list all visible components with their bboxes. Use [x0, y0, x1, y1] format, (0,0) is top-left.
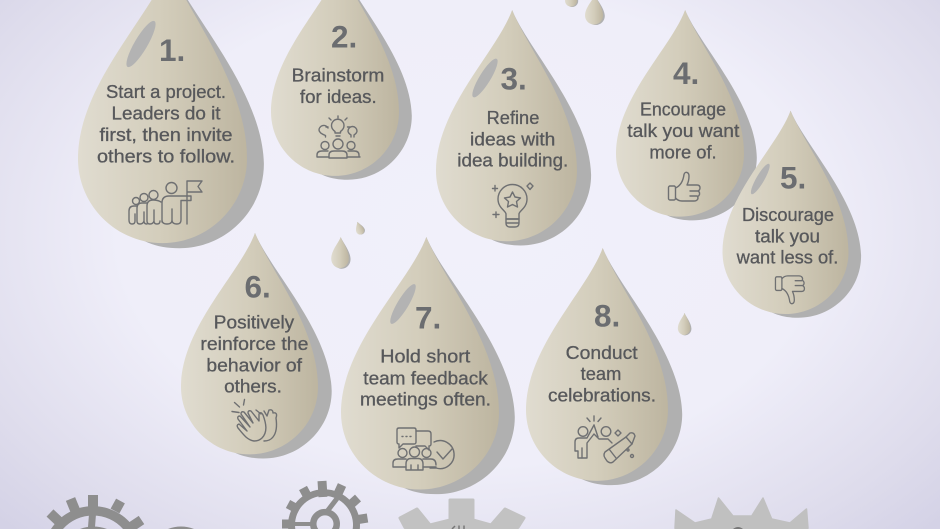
step text: Hold short [380, 347, 470, 367]
step text: Conduct [566, 343, 638, 363]
drop shape [181, 233, 332, 458]
icon: team brainstorming with light bulbs [317, 116, 360, 158]
gear 3 [400, 500, 524, 529]
number: 7. [415, 299, 441, 335]
drop 6 [181, 233, 332, 458]
icon: thumbs up [668, 172, 700, 201]
number: 5. [780, 159, 806, 195]
drop 7 [341, 237, 515, 494]
gear 1 [50, 495, 194, 529]
icon: leader with flag and followers [129, 181, 202, 224]
step text: behavior of [206, 356, 303, 376]
drop shape [526, 248, 682, 485]
step text: meetings often. [360, 390, 491, 410]
gear 4 [675, 498, 808, 529]
step text: want less of. [736, 247, 838, 267]
step text [360, 347, 491, 410]
step text: ideas with [470, 129, 555, 149]
step text: first, then invite [100, 125, 232, 145]
icon: thumbs down [775, 276, 804, 304]
icon: team meeting with speech bubbles and clock [393, 428, 454, 470]
step text: team feedback [363, 368, 489, 388]
highlight [469, 56, 501, 100]
highlight [748, 162, 773, 196]
icon: light bulb with star [492, 183, 533, 227]
step text: Positively [214, 312, 294, 332]
step text: Leaders do it [112, 104, 220, 124]
small drop: top left [565, 0, 578, 7]
step text: Brainstorm [292, 66, 384, 86]
icon: clapping hands [232, 400, 277, 441]
number: 3. [500, 60, 527, 96]
step text [548, 343, 656, 406]
step text [736, 205, 838, 267]
drop shape [616, 10, 757, 220]
number: 8. [594, 298, 620, 334]
highlight [386, 281, 420, 327]
drop shape [271, 0, 412, 180]
step text: talk you [755, 226, 820, 246]
small drop: top right [585, 0, 605, 25]
step text: for ideas. [300, 87, 377, 107]
step text [292, 66, 384, 107]
highlight [122, 18, 160, 70]
drop 8 [526, 248, 682, 485]
number: 4. [673, 55, 699, 91]
drop shape [341, 237, 515, 494]
step text: more of. [649, 142, 717, 162]
step text: reinforce the [200, 334, 308, 354]
number: 2. [331, 19, 357, 55]
step text: Encourage [640, 100, 726, 120]
small drop: centre [331, 237, 351, 269]
small drop: right [678, 313, 691, 335]
step text [200, 312, 308, 397]
step text: Refine [487, 108, 539, 128]
number: 6. [244, 268, 271, 304]
drop shape [436, 10, 591, 245]
step text: talk you want [627, 121, 739, 141]
drop 4 [616, 10, 757, 220]
step text [627, 100, 739, 162]
drop shape [722, 111, 861, 318]
step text [97, 82, 235, 167]
small drop: tilted [353, 220, 366, 236]
step text: Start a project. [106, 82, 226, 102]
drop 3 [436, 10, 591, 245]
step text: idea building. [457, 151, 568, 171]
icon: team high five with champagne [575, 416, 635, 463]
step text: others to follow. [97, 147, 235, 167]
step text: others. [224, 377, 282, 397]
step text [457, 108, 568, 171]
step text: team [581, 364, 621, 384]
drop 2 [271, 0, 412, 180]
drop 5 [722, 111, 861, 318]
step text: celebrations. [548, 386, 656, 406]
gear 2 [282, 481, 368, 529]
step text: Discourage [742, 205, 834, 225]
drop 1 [78, 0, 264, 248]
drop shape [78, 0, 264, 248]
number: 1. [159, 32, 185, 68]
